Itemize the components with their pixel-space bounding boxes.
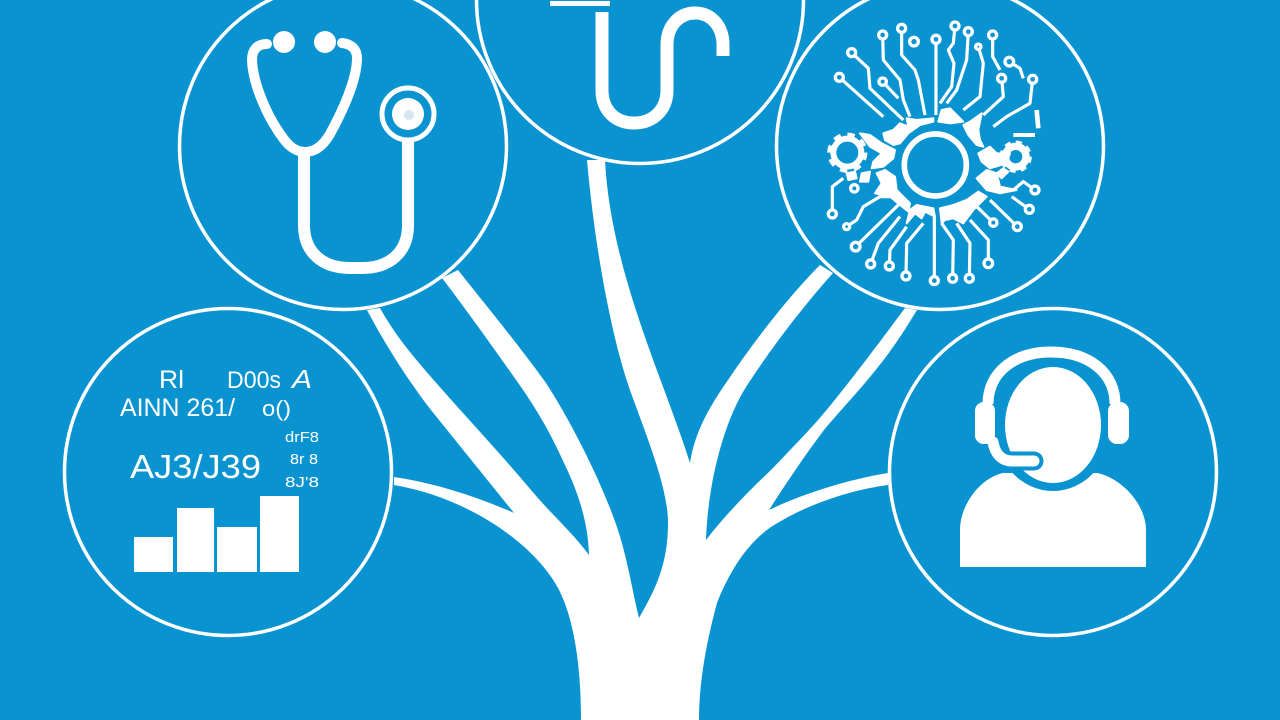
circuit circle outline bbox=[776, 0, 1104, 310]
circuit hub clusters bbox=[847, 108, 1017, 223]
circuit nodes bbox=[828, 22, 1039, 285]
icon: curved tube bbox=[550, 1, 723, 123]
analytics text lines: AINN 261/ bbox=[120, 394, 235, 422]
bar chart bbox=[134, 496, 299, 572]
analytics text lines: A bbox=[290, 364, 312, 394]
panel: analytics circle bbox=[64, 308, 392, 636]
support circle outline bbox=[890, 308, 1216, 636]
panel: support agent circle bbox=[890, 308, 1216, 636]
analytics text lines: 8J'8 bbox=[285, 474, 319, 491]
analytics text lines: Rl bbox=[159, 366, 184, 394]
analytics text lines bbox=[120, 364, 319, 491]
gears bbox=[829, 135, 1030, 171]
analytics text lines: drF8 bbox=[285, 429, 319, 446]
analytics text lines: o() bbox=[262, 396, 291, 421]
analytics text lines: AJ3/J39 bbox=[130, 448, 261, 485]
analytics circle outline bbox=[64, 308, 392, 636]
icon: support agent with headset bbox=[960, 352, 1146, 567]
panel: stethoscope circle bbox=[180, 0, 506, 310]
panel: top circle bbox=[476, 0, 804, 164]
icon: stethoscope bbox=[252, 31, 434, 268]
icon: circuit brain bbox=[828, 22, 1039, 285]
panel: circuit circle bbox=[776, 0, 1104, 310]
stethoscope circle outline bbox=[180, 0, 506, 310]
analytics text lines: D00s bbox=[227, 367, 281, 394]
analytics text lines: 8r 8 bbox=[290, 451, 318, 468]
top circle outline bbox=[476, 0, 804, 164]
tree trunk and branches bbox=[367, 160, 917, 720]
